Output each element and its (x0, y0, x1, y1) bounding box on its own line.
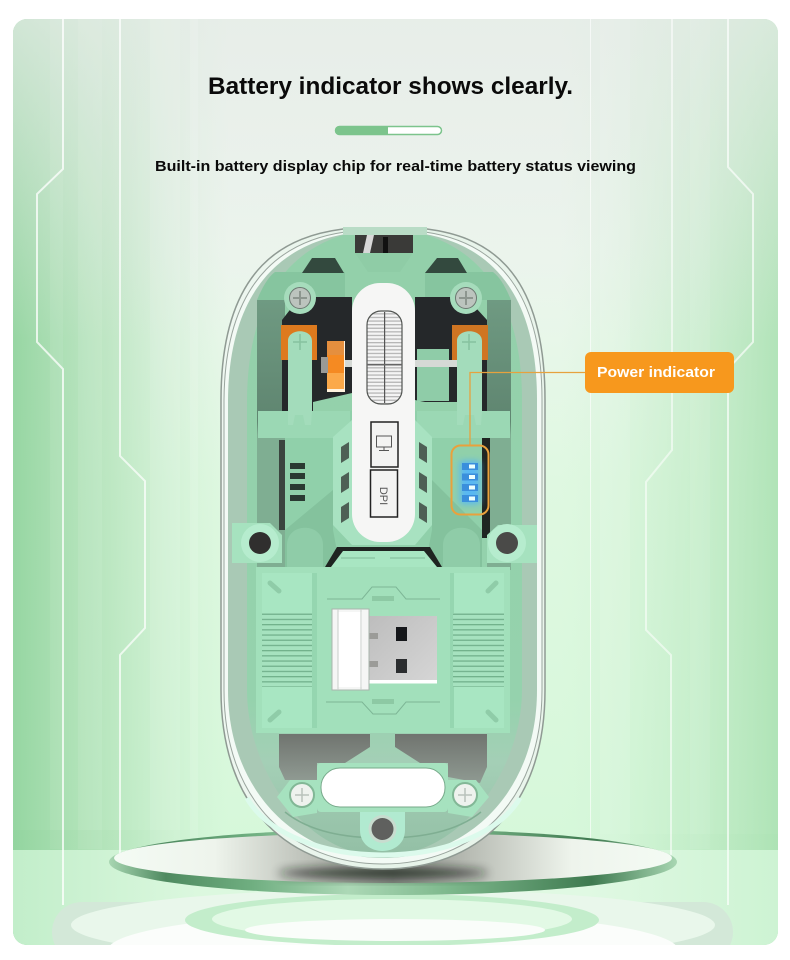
floor arcs (285, 812, 481, 838)
ribbed grips (262, 613, 312, 687)
lower rim highlight (247, 798, 520, 855)
hex button carrier (333, 420, 432, 545)
callout: power indicator: Power indicator (597, 365, 715, 381)
scroll encoder (321, 341, 345, 392)
title: Battery indicator shows clearly. (208, 73, 573, 100)
display disc (109, 829, 677, 895)
axle (343, 360, 458, 367)
callout: power indicator (585, 352, 734, 393)
tray markings (326, 587, 440, 714)
lower centre body (285, 411, 482, 567)
glass shell (221, 229, 545, 869)
transparent mouse (221, 227, 545, 869)
switch arms (288, 331, 482, 425)
screw bosses (284, 282, 482, 314)
callout leader line (470, 372, 586, 445)
carrier slots (341, 442, 427, 523)
bottom screws (277, 780, 489, 817)
USB receiver (332, 609, 437, 690)
pedestal (52, 892, 733, 945)
bottom bracket (325, 547, 442, 567)
button: monitor (371, 422, 398, 467)
highlight frame (452, 446, 488, 514)
circuit board (282, 297, 352, 411)
green inner body (228, 234, 537, 858)
subtitle: Built-in battery display chip for real-time battery status viewing (155, 158, 636, 175)
battery bar icon (335, 126, 442, 135)
orange switches (281, 325, 317, 360)
cross bars (258, 411, 350, 438)
top chevrons (302, 258, 344, 273)
white label plate (317, 763, 448, 812)
receiver tray (256, 567, 510, 733)
battery compartment trays (279, 734, 487, 783)
mounting bosses (232, 523, 537, 567)
top window (343, 227, 427, 272)
side block (417, 349, 449, 401)
vent slots (290, 463, 305, 501)
button: DPI: DPI (377, 487, 389, 505)
white scroll cover (352, 283, 415, 542)
bottom boss (360, 812, 405, 851)
side wells (257, 300, 285, 570)
battery LEDs (460, 461, 480, 504)
button: DPI (370, 470, 398, 517)
scroll wheel (367, 311, 402, 404)
